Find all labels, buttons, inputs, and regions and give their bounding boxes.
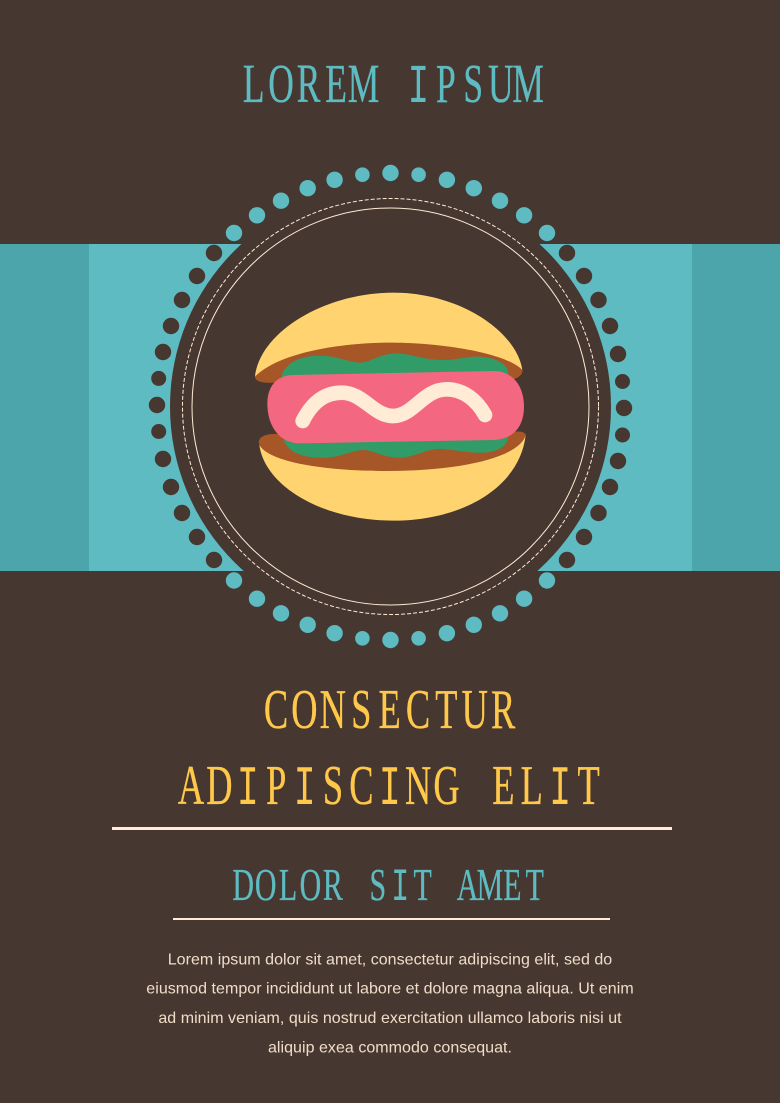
title: LOREM IPSUM — [243, 53, 544, 119]
bottom bun — [259, 435, 526, 521]
dark dots left arc — [149, 245, 222, 568]
central dark circle — [170, 186, 611, 627]
lettuce bottom — [283, 435, 508, 458]
subheading: DOLOR SIT AMET — [232, 860, 544, 914]
icon: hot dog burger — [255, 293, 526, 521]
body text: Lorem ipsum dolor sit amet, consectetur adipiscing elit, sed do — [168, 952, 612, 968]
heading line 1: CONSECTUR — [264, 679, 516, 741]
horizontal teal band — [0, 244, 780, 571]
body text: ad minim veniam, quis nostrud exercitation ullamco laboris nisi ut — [158, 1010, 622, 1027]
divider under heading — [112, 827, 672, 830]
sausage — [267, 371, 524, 443]
dark dots right arc — [559, 245, 632, 568]
teal dots top arc — [226, 165, 555, 241]
body text: eiusmod tempor incididunt ut labore et dolore magna aliqua. Ut enim — [146, 980, 634, 998]
teal dots bottom arc — [226, 572, 555, 648]
divider under subheading — [173, 918, 610, 920]
body text — [146, 952, 634, 1056]
top bun underside — [255, 343, 522, 383]
mustard squiggle — [303, 389, 485, 421]
solid ring — [192, 208, 589, 605]
top bun — [255, 293, 522, 377]
heading line 2: ADIPISCING ELIT — [178, 755, 600, 822]
body text: aliquip exea commodo consequat. — [268, 1040, 512, 1056]
lettuce top — [282, 353, 508, 382]
bottom bun inner — [259, 432, 526, 471]
dashed ring — [182, 198, 598, 614]
